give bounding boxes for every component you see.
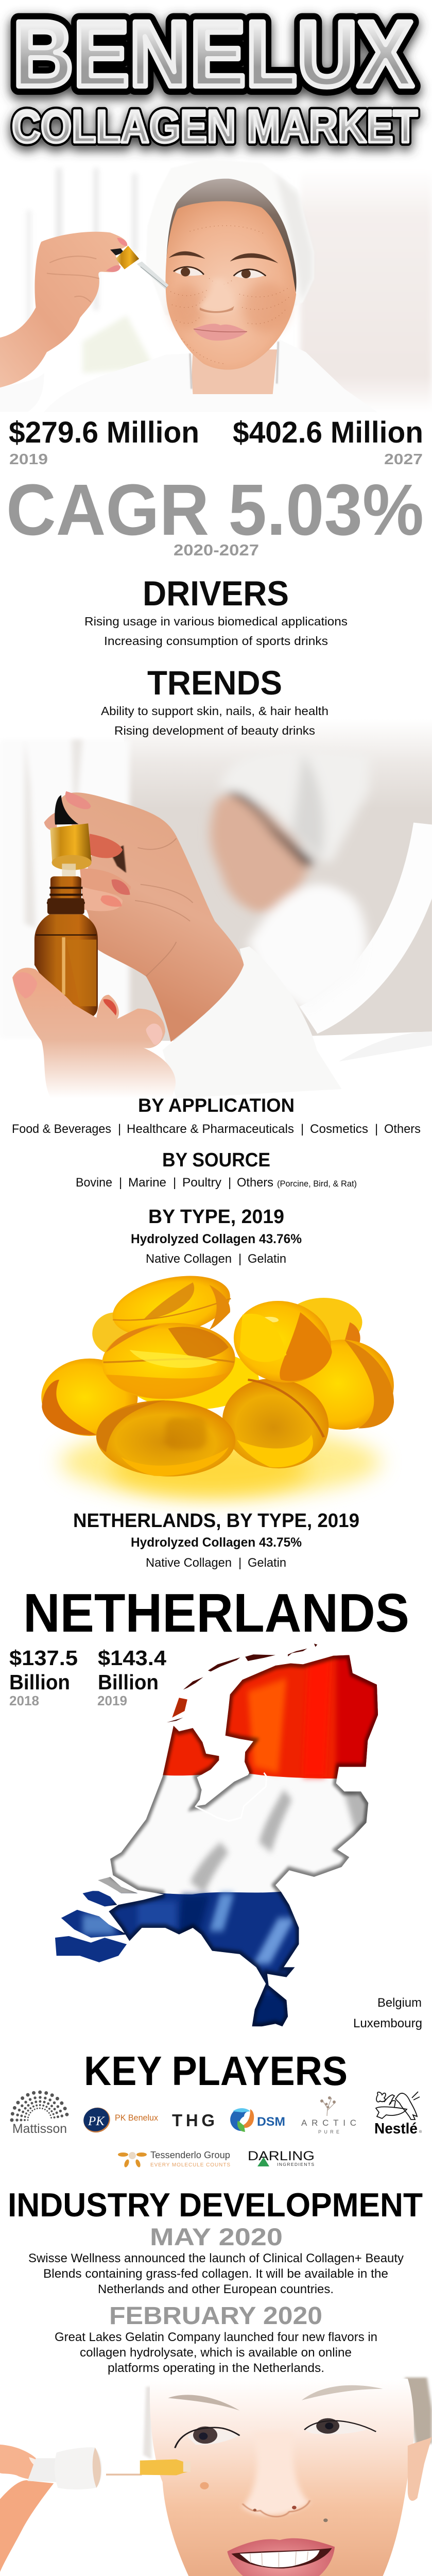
segment: by application: Cosmetics <box>310 1122 368 1136</box>
segment: by type 2019: Gelatin <box>248 1252 286 1266</box>
segment: by source: | <box>173 1176 176 1190</box>
dropper bulb and collar <box>50 795 92 877</box>
segment: by application: Others <box>384 1122 421 1136</box>
photo: woman applying serum with dropper <box>0 159 432 412</box>
stat: 2019 market size: 2019 <box>9 451 48 468</box>
logo: Arctic Pure <box>301 2096 356 2134</box>
panel: trends: Rising development of beauty drinks <box>114 724 315 737</box>
development: May 2020: MAY 2020 <box>150 2223 283 2250</box>
logo: Arctic Pure: PURE <box>318 2129 339 2134</box>
logo: Nestle <box>374 2092 422 2137</box>
segment: by application: BY APPLICATION <box>138 1095 295 1116</box>
segment: Netherlands by type: Gelatin <box>248 1556 286 1570</box>
logo: Arctic Pure: ARCTIC <box>301 2118 356 2128</box>
brows <box>168 2395 239 2411</box>
photo: golden softgel capsules <box>41 1266 405 1497</box>
segment: by application: | <box>301 1122 304 1136</box>
logo: Mattisson: Mattisson <box>12 2122 67 2136</box>
panel: drivers: DRIVERS <box>143 574 289 613</box>
logo: Tessenderlo Group: Tessenderlo Group <box>150 2150 230 2160</box>
stat: 2027 market size: 2027 <box>384 451 423 468</box>
stat: Netherlands 2019 <box>97 1646 166 1708</box>
logo: PK Benelux: PK <box>88 2114 105 2128</box>
development: February 2020: FEBRUARY 2020 <box>109 2302 322 2330</box>
development: May 2020 <box>28 2223 404 2296</box>
segment: by source: BY SOURCE <box>162 1149 270 1171</box>
capsule bottom left <box>94 1397 237 1480</box>
segment: by source: (Porcine, Bird, & Rat) <box>277 1179 357 1189</box>
blurred reflection of woman <box>210 749 369 1013</box>
stat: 2027 market size <box>233 416 423 468</box>
logo: PK Benelux <box>80 2104 158 2136</box>
stat: 2027 market size: $402.6 Million <box>233 416 423 449</box>
amber bottle <box>34 876 98 1018</box>
lips and teeth <box>227 2538 335 2576</box>
stat: Netherlands 2019: Billion <box>98 1670 159 1694</box>
Wadden islands <box>167 1643 317 1722</box>
panel: trends: Ability to support skin, nails, & hair health <box>101 704 329 718</box>
logo: Darling Ingredients: DARLING <box>248 2149 315 2163</box>
segment: by source: Others <box>237 1176 273 1190</box>
panel: drivers <box>84 574 348 648</box>
capsule bottom right <box>208 1365 343 1482</box>
segment: Netherlands by type: | <box>238 1556 241 1570</box>
segment: by application <box>12 1095 421 1136</box>
white dropper with gold serum <box>27 2447 191 2489</box>
logo: Nestle: Nestlé <box>374 2121 418 2137</box>
development: February 2020: platforms operating in the Netherlands. <box>108 2361 324 2375</box>
capsule middle <box>99 1319 238 1403</box>
logo: Mattisson <box>12 2092 67 2136</box>
segment: by application: Healthcare & Pharmaceuticals <box>127 1122 294 1136</box>
segment: by source: Poultry <box>182 1176 221 1190</box>
segment: by source <box>76 1149 357 1190</box>
face <box>150 2379 414 2576</box>
panel: drivers: Rising usage in various biomedical applications <box>84 615 348 628</box>
logo: Darling Ingredients: INGREDIENTS <box>277 2162 314 2167</box>
panel: trends <box>101 664 329 737</box>
labels: other countries <box>353 1996 422 2030</box>
robe sleeve <box>163 946 341 1098</box>
stat: Netherlands 2018: $137.5 <box>9 1646 78 1670</box>
capsule right <box>219 1286 346 1397</box>
stat: Netherlands 2018 <box>9 1646 78 1708</box>
segment: Netherlands by type <box>73 1510 359 1570</box>
panel: trends: TRENDS <box>147 664 282 702</box>
freckles <box>171 226 290 364</box>
capsule far left <box>41 1359 137 1436</box>
segment: by type 2019: BY TYPE, 2019 <box>148 1206 284 1228</box>
logo: PK Benelux: PK Benelux <box>115 2113 158 2123</box>
photo: smiling woman with serum dropper <box>0 2378 432 2576</box>
development: May 2020: Netherlands and other European countries. <box>98 2282 334 2296</box>
segment: by source: Marine <box>128 1176 166 1190</box>
logo: THG: THG <box>172 2111 215 2130</box>
logo: Nestle: ® <box>419 2130 422 2134</box>
logo: DSM <box>230 2108 285 2132</box>
labels: other countries: Luxembourg <box>353 2016 422 2030</box>
title: Benelux Collagen Market <box>12 2 418 156</box>
fingers <box>0 2445 53 2480</box>
title shadow <box>12 6 418 156</box>
stat: CAGR: 2020-2027 <box>174 541 259 559</box>
labels: other countries: Belgium <box>377 1996 422 2010</box>
logo: DSM: DSM <box>257 2115 285 2129</box>
dropper <box>110 246 168 289</box>
segment: by application: | <box>118 1122 121 1136</box>
segment: Netherlands by type: Hydrolyzed Collagen 43.75% <box>131 1535 302 1550</box>
segment: Netherlands by type: NETHERLANDS, BY TYPE, 2019 <box>73 1510 359 1532</box>
segment: by source: | <box>228 1176 231 1190</box>
development: February 2020: Great Lakes Gelatin Company launched four new flavors in <box>55 2330 377 2344</box>
eyes <box>175 2418 376 2448</box>
capsule top left <box>106 1266 237 1346</box>
stat: Netherlands 2018: Billion <box>9 1670 70 1694</box>
capsule far right <box>281 1329 405 1440</box>
segment: by type 2019: Native Collagen <box>146 1252 232 1266</box>
robe <box>44 339 377 412</box>
stat: 2019 market size: $279.6 Million <box>9 416 199 449</box>
heading: Netherlands: NETHERLANDS <box>23 1583 409 1643</box>
stat: Netherlands 2019: $143.4 <box>98 1646 166 1670</box>
segment: by source: Bovine <box>76 1176 112 1190</box>
segment: by application: | <box>375 1122 378 1136</box>
development: May 2020: Swisse Wellness announced the launch of Clinical Collagen+ Beauty <box>28 2251 404 2265</box>
stat: Netherlands 2019: 2019 <box>97 1693 127 1708</box>
photo: amber serum bottle and mirror <box>0 719 432 1123</box>
segment: by source: | <box>119 1176 122 1190</box>
segment: by type 2019 <box>131 1206 302 1266</box>
arm and hand <box>0 232 127 387</box>
segment: by application: Food & Beverages <box>12 1122 111 1136</box>
heading: key players: KEY PLAYERS <box>84 2048 348 2094</box>
development: May 2020: Blends containing grass-fed collagen. It will be available in the <box>43 2267 388 2281</box>
logo: Tessenderlo Group <box>118 2150 230 2168</box>
development: February 2020 <box>55 2302 377 2375</box>
map: Netherlands in flag colours <box>55 1643 378 2027</box>
eyes <box>174 267 266 278</box>
lips <box>194 324 247 341</box>
stat: 2019 market size <box>9 416 199 468</box>
heading: industry development: INDUSTRY DEVELOPMENT <box>8 2186 423 2224</box>
logo: Tessenderlo Group: EVERY MOLECULE COUNTS <box>150 2162 230 2168</box>
segment: by type 2019: Hydrolyzed Collagen 43.76% <box>131 1232 302 1246</box>
panel: drivers: Increasing consumption of sports drinks <box>104 634 328 648</box>
lower hand <box>12 968 176 1100</box>
stat: Netherlands 2018: 2018 <box>9 1693 39 1708</box>
upper hand <box>61 792 244 1042</box>
segment: Netherlands by type: Native Collagen <box>146 1556 232 1570</box>
development: February 2020: collagen hydrolysate, which is available on online <box>80 2346 352 2360</box>
logo: Darling Ingredients <box>248 2149 315 2167</box>
hair <box>405 2378 432 2446</box>
segment: by type 2019: | <box>238 1252 241 1266</box>
